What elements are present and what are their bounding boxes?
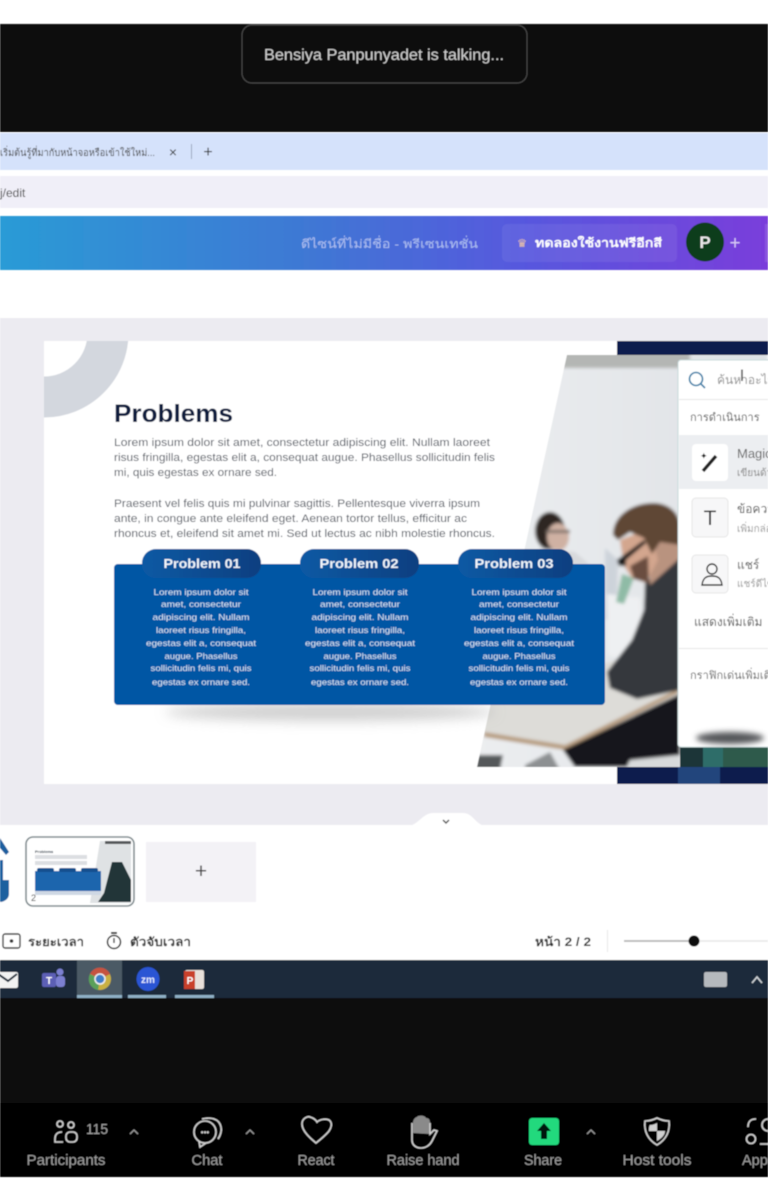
- host tools: [622, 1118, 692, 1169]
- problem 01 card: [142, 549, 261, 687]
- app: powerpoint: [175, 970, 214, 998]
- problem 01 card: laoreet risus fringilla,: [156, 625, 246, 635]
- app: powerpoint: P: [187, 976, 194, 987]
- problem 03 card: egestas elit a, consequat: [464, 638, 575, 648]
- thumbnail page 2: [26, 837, 134, 906]
- slide body text: ante, in congue ante eleifend eget. Aenean tortor tellus, efficitur ac: [114, 513, 468, 525]
- problem 03 card: Lorem ipsum dolor sit: [472, 587, 567, 597]
- problem 02 card: Lorem ipsum dolor sit: [312, 587, 408, 597]
- slide body text: Lorem ipsum dolor sit amet, consectetur adipiscing elit. Nullam laoreet: [114, 437, 490, 449]
- photo: office meeting: [470, 350, 768, 770]
- problem 02 card: Problem 02: [320, 556, 398, 571]
- problem 02 card: augue. Phasellus: [324, 651, 396, 661]
- problem 03 card: Problem 03: [474, 556, 554, 571]
- timer control: [108, 932, 191, 949]
- react: [298, 1117, 334, 1169]
- problem 01 card: amet, consectetur: [161, 599, 241, 609]
- problem 02 card: egestas ex ornare sed.: [311, 677, 409, 687]
- browser tab strip: [0, 133, 768, 170]
- chat: [192, 1118, 254, 1169]
- raise hand: Raise hand: [386, 1153, 460, 1169]
- trial button: [502, 224, 677, 262]
- problem 03 card: laoreet risus fringilla,: [474, 625, 564, 635]
- add page button: +: [195, 860, 207, 883]
- problem 02 card: laoreet risus fringilla,: [315, 625, 405, 635]
- table surface: [485, 661, 677, 746]
- search row: I: [740, 366, 744, 385]
- problem 03 card: sollicitudin felis mi, quis: [468, 663, 570, 673]
- menu item: text: T: [704, 507, 717, 530]
- problems panel: [114, 549, 605, 705]
- host tools: Host tools: [622, 1153, 692, 1169]
- app: chrome: [77, 960, 122, 998]
- foreground dark: [563, 694, 680, 767]
- problem 02 card: [300, 549, 419, 687]
- browser tab strip: +: [203, 144, 213, 161]
- browser address bar: [0, 176, 768, 208]
- app: zoom: zm: [141, 975, 155, 986]
- meeting toolbar: [0, 1103, 768, 1177]
- problem 02 card: sollicitudin felis mi, quis: [310, 663, 410, 673]
- problem 02 card: amet, consectetur: [320, 599, 400, 609]
- editor header bar: ดีไซน์ที่ไม่มีชื่อ - พรีเซนเทชั่น: [301, 235, 478, 251]
- problem 01 card: augue. Phasellus: [164, 651, 238, 661]
- problem 01 card: Lorem ipsum dolor sit: [154, 587, 249, 597]
- react: React: [298, 1153, 334, 1169]
- video call top bar: [0, 24, 768, 132]
- timer control: ตัวจับเวลา: [130, 935, 191, 949]
- menu item: Magic: ✦: [700, 451, 708, 461]
- problem 03 card: amet, consectetur: [479, 599, 559, 609]
- man glasses: [617, 540, 646, 566]
- slide body text: mi, quis egestas ex ornare sed.: [114, 467, 277, 479]
- decorative arc: [44, 340, 128, 418]
- share: Share: [524, 1153, 562, 1169]
- raise hand: [386, 1116, 460, 1169]
- browser tab strip: เริ่มต้นรู้ที่มากับหน้าจอหรือเข้าใช้ใหม่...: [0, 145, 155, 159]
- slide body text: [114, 437, 496, 540]
- editor header bar: [0, 216, 768, 270]
- add page button: [146, 842, 256, 902]
- thumbnail page 2: 2: [31, 893, 36, 903]
- bottom white strip: [0, 825, 768, 960]
- navy bands: [617, 341, 768, 784]
- menu item: share: แชร์: [737, 558, 760, 572]
- browser address bar: j/edit: [0, 186, 26, 200]
- problem 01 card: Problem 01: [164, 556, 240, 571]
- search row: [690, 366, 768, 388]
- problem 02 card: adipiscing elit. Nullam: [312, 612, 408, 622]
- assistant side menu: การดำเนินการ: [690, 412, 760, 424]
- app: mail: [0, 972, 18, 988]
- chat: •••: [201, 1128, 209, 1137]
- app: teams: T: [46, 976, 52, 987]
- man jacket: [607, 558, 680, 699]
- slide body text: risus fringilla, egestas elit a, consequat augue. Phasellus sollicitudin felis: [114, 452, 496, 464]
- talking indicator pill: [242, 25, 527, 83]
- panel shadow: [165, 703, 495, 721]
- thumbnail page 2: Problems: [35, 849, 54, 854]
- avatar: P: [699, 233, 711, 252]
- talking indicator pill: Bensiya Panpunyadet is talking...: [264, 47, 504, 64]
- problem 01 card: sollicitudin felis mi, quis: [150, 663, 252, 673]
- collapse notch: [409, 813, 485, 826]
- partial thumbnail page 1: [0, 838, 9, 902]
- chat: Chat: [192, 1153, 222, 1169]
- participants: [26, 1121, 138, 1169]
- app: zoom: [128, 967, 166, 998]
- app: teams: [42, 968, 65, 987]
- assistant side menu: แสดงเพิ่มเติม: [694, 613, 762, 629]
- avatar: [686, 222, 724, 262]
- problem 03 card: [458, 549, 575, 687]
- problem 01 card: egestas ex ornare sed.: [152, 677, 250, 687]
- problem 01 card: adipiscing elit. Nullam: [152, 612, 250, 622]
- share: [524, 1118, 595, 1169]
- menu item: text: [692, 498, 768, 537]
- apps: [742, 1119, 768, 1169]
- trial button: ♛: [517, 238, 527, 250]
- blurred thumbnail: [696, 732, 764, 744]
- problem 01 card: egestas elit a, consequat: [146, 638, 257, 648]
- problem 03 card: augue. Phasellus: [482, 651, 556, 661]
- slide body text: Praesent vel felis quis mi pulvinar sagittis. Pellentesque viverra ipsum: [114, 498, 480, 510]
- participants: Participants: [26, 1153, 106, 1169]
- system tray: [704, 972, 762, 987]
- photo bottom strip: [678, 746, 768, 784]
- slide title: Problems: [114, 400, 233, 428]
- editor header bar: +: [729, 233, 741, 254]
- windows taskbar: [0, 960, 768, 998]
- duration control: [3, 934, 84, 949]
- woman: [535, 512, 565, 550]
- slide: [44, 340, 768, 785]
- man neck and face: [648, 538, 680, 585]
- menu item: Magic: [679, 435, 768, 489]
- zoom slider: [607, 930, 768, 952]
- problem 03 card: adipiscing elit. Nullam: [470, 612, 568, 622]
- problem 02 card: egestas elit a, consequat: [305, 638, 416, 648]
- browser tab strip: ×: [169, 144, 177, 160]
- problem 03 card: egestas ex ornare sed.: [470, 677, 568, 687]
- man hair: [613, 503, 680, 554]
- assistant side menu: [678, 360, 768, 747]
- duration control: ระยะเวลา: [28, 935, 84, 949]
- slide body text: rhoncus et, eleifend sit amet mi. Sed ut lectus ac nibh molestie rhoncus.: [114, 528, 495, 540]
- canvas background: [0, 318, 768, 825]
- video area bottom: [0, 998, 768, 1103]
- menu item: share: [692, 555, 768, 593]
- trial button: ทดลองใช้งานฟรีอีกสี: [535, 235, 663, 250]
- page indicator: หน้า 2 / 2: [535, 935, 591, 949]
- participants: 115: [86, 1121, 108, 1138]
- screen and papers: [605, 548, 618, 620]
